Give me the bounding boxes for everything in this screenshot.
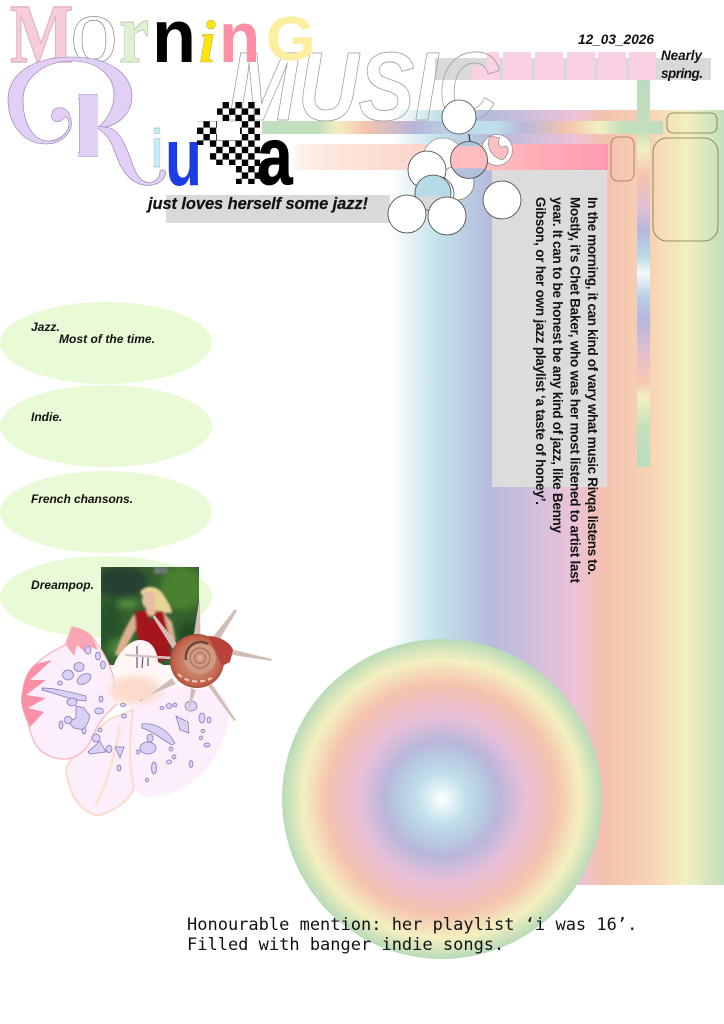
- tagline: just loves herself some jazz!: [146, 195, 368, 213]
- bubble cluster: [388, 100, 521, 235]
- genre labels: Dreampop.: [31, 578, 94, 592]
- outlined word MUSIC: MUSIC: [228, 33, 500, 141]
- title: Morning: [10, 0, 316, 83]
- shell spines: [125, 597, 272, 727]
- lavender spots: [42, 646, 211, 782]
- title: Morning: i: [199, 9, 216, 75]
- honourable mention text: [187, 915, 637, 955]
- title: Rivqa: i: [151, 120, 163, 179]
- body copy rotated: In the morning, it can kind of vary what music Rivqa listens to.: [585, 197, 600, 575]
- body copy rotated: year. It can to be honest be any kind of jazz, like Benny: [550, 197, 565, 533]
- season note: [661, 48, 703, 81]
- season note: Nearly: [661, 48, 703, 63]
- body copy rotated: Mostly, it's Chet Baker, who was her most listened to artist last: [568, 197, 582, 584]
- pink squares strip: [472, 52, 656, 80]
- outlined rounded boxes: [611, 113, 718, 241]
- genre labels: [31, 320, 155, 592]
- body copy rotated: Gibson, or her own jazz playlist ‘a taste of honey’.: [533, 197, 548, 505]
- grey text panel: [492, 170, 607, 487]
- centre petal: [114, 640, 173, 708]
- vertical rainbow bar: [637, 80, 650, 467]
- date: 12_03_2026: [578, 32, 654, 47]
- genre labels: Most of the time.: [59, 332, 155, 346]
- title: Rivqa: u: [165, 112, 202, 203]
- spiral shell: [125, 597, 272, 727]
- left petal: [22, 627, 118, 759]
- pink gradient bar: [295, 144, 608, 170]
- grey bar behind date: [435, 58, 711, 80]
- genre ovals: [0, 302, 212, 638]
- big swash letter R: R: [66, 71, 168, 178]
- title: Rivqa: [8, 56, 294, 186]
- horizontal rainbow bar: [262, 121, 663, 134]
- checker letter q: [197, 102, 260, 184]
- honourable mention text: Honourable mention: her playlist ‘i was 16’.: [187, 915, 637, 935]
- honourable mention text: Filled with banger indie songs.: [187, 935, 504, 955]
- grey bar behind tagline: [166, 195, 390, 223]
- season note: spring.: [661, 66, 703, 81]
- photo of woman: [101, 567, 199, 665]
- title: Rivqa: a: [257, 109, 294, 202]
- genre labels: French chansons.: [31, 492, 133, 506]
- title: Morning: G: [266, 5, 316, 74]
- genre labels: Indie.: [31, 410, 62, 424]
- big swash letter R: [8, 57, 168, 185]
- lower petal: [66, 710, 134, 815]
- flower: [22, 627, 229, 815]
- right petal: [126, 686, 229, 797]
- body copy rotated: [533, 197, 600, 584]
- gradient panel: [390, 110, 724, 885]
- genre labels: Jazz.: [31, 320, 60, 334]
- rainbow disc: [282, 639, 602, 959]
